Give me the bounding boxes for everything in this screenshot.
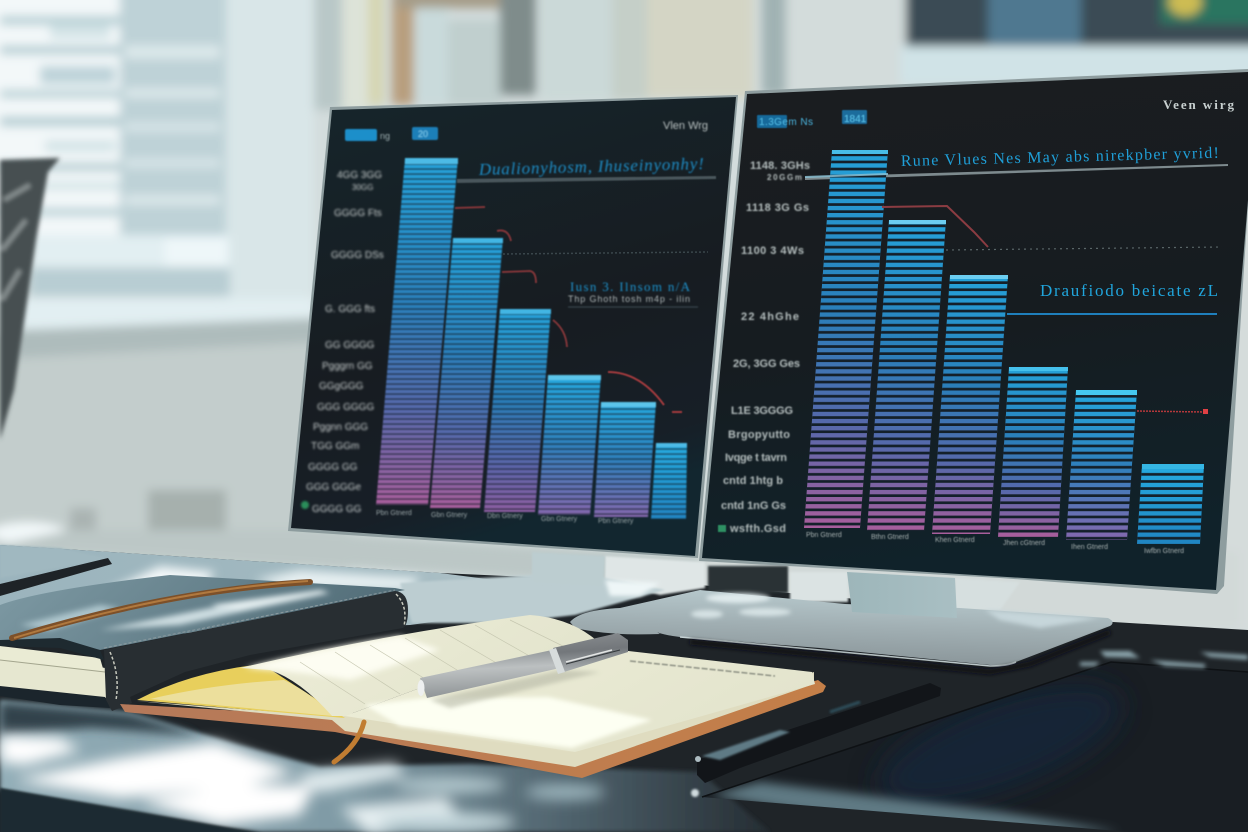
bottom pages (137, 672, 814, 767)
radiator vent (148, 490, 226, 536)
left trend lines (455, 207, 682, 412)
brown elastic strap (12, 581, 310, 638)
right tabs: 1.3Gem Ns (759, 117, 813, 128)
left tabs: 20 (418, 129, 428, 139)
left view label: Vlen Wrg (663, 120, 708, 132)
curled page (240, 615, 596, 716)
silver pen (418, 633, 628, 708)
right heading: Rune Vlues Nes May abs nirekpber yvrid! (901, 145, 1219, 170)
right y-axis labels: 20GGm (767, 173, 802, 182)
dark gap between stands (708, 566, 788, 593)
right x-axis labels: Bthn Gtnerd (871, 534, 909, 541)
sun patches foreground (0, 735, 605, 832)
right monitor (699, 69, 1248, 594)
sun patches behind journal (110, 566, 420, 600)
left callout: Thp Ghoth tosh m4p - ilin (568, 294, 690, 304)
desk surface (0, 545, 1248, 832)
right x-axis labels: Pbn Gtnerd (806, 532, 842, 539)
right red marker (1137, 409, 1208, 414)
right y-axis labels: Brgopyutto (728, 429, 790, 441)
left y-axis labels: Pgggrn GG (322, 361, 373, 372)
journal spine (104, 591, 408, 711)
left monitor stand (400, 552, 705, 623)
right x-axis labels: Ihen Gtnerd (1071, 544, 1108, 551)
right x-axis labels: Khen Gtnerd (935, 537, 975, 544)
leather journal (0, 575, 408, 711)
right sub heading: Draufiodo beicate zL (1040, 281, 1218, 300)
right y-axis labels: wsfth.Gsd (729, 523, 786, 535)
left x-axis labels (376, 510, 634, 525)
left dashed line (503, 252, 708, 254)
right y-axis labels (721, 160, 810, 535)
right heading (805, 145, 1228, 180)
left y-axis labels: Pggnn GGG (313, 422, 368, 433)
wall band behind monitors (0, 530, 700, 590)
page lines (300, 620, 575, 704)
window blinds (0, 0, 226, 236)
left y-axis labels: G. GGG fts (325, 304, 375, 315)
right y-axis labels: 22 4hGhe (741, 311, 799, 323)
highlight line across first bar (805, 174, 888, 177)
left x-axis labels: Gbn Gtnery (541, 516, 578, 523)
stand shadow (690, 632, 1110, 672)
right y-axis labels: 1148. 3GHs (750, 160, 810, 172)
right status dot (718, 525, 726, 532)
right page (345, 640, 815, 752)
notebook cover (120, 680, 826, 778)
lit desk behind journal (0, 545, 620, 640)
journal pages (0, 647, 108, 698)
right x-axis labels (806, 532, 1184, 555)
right bar chart (804, 150, 1204, 544)
right y-axis labels: cntd 1nG Gs (721, 500, 786, 512)
right y-axis labels: 1118 3G Gs (746, 202, 809, 214)
left callout (568, 279, 698, 307)
left status dot (301, 501, 309, 509)
right tabs (757, 110, 867, 128)
journal front flap (0, 638, 104, 660)
right monitor stand (570, 572, 1113, 666)
left y-axis labels: GGG GGGe (306, 482, 361, 493)
window sill (15, 235, 350, 358)
left x-axis labels: Pbn Gtnery (598, 518, 634, 525)
left tabs (345, 127, 438, 141)
blurred shelf of books (312, 0, 906, 110)
chair back (0, 158, 60, 440)
tablet at far left (0, 545, 112, 596)
right tabs: 1841 (844, 114, 867, 125)
left y-axis labels: GGG GGGG (317, 402, 374, 413)
left y-axis labels: 4GG 3GG (337, 170, 382, 181)
journal cover (0, 575, 405, 650)
right x-axis labels: Jhen cGtnerd (1003, 540, 1045, 547)
left y-axis labels: GGgGGG (319, 381, 364, 392)
left y-axis labels: GGGG Fts (334, 208, 382, 219)
right dashed line (946, 247, 1222, 250)
handwritten line (630, 661, 775, 676)
right red trend line (882, 206, 988, 247)
left y-axis labels: GGGG DSs (331, 250, 384, 261)
left heading: Dualionyhosm, Ihuseinyonhy! (478, 154, 704, 179)
window frame (222, 0, 314, 335)
left y-axis labels: TGG GGm (311, 441, 359, 452)
notebook bookmark (334, 722, 364, 762)
left y-axis labels (306, 170, 384, 515)
left y-axis labels: 30GG (352, 183, 373, 192)
right y-axis labels: Ivqge t tavrn (725, 452, 787, 464)
yellow left page (137, 664, 345, 718)
right x-axis labels: Iwfbn Gtnerd (1144, 548, 1184, 555)
right view label: Veen wirg (1163, 97, 1234, 112)
left bar chart (376, 158, 687, 519)
left monitor (288, 95, 738, 558)
blurred poster (900, 0, 1248, 85)
left x-axis labels: Dbn Gtnery (487, 513, 523, 520)
right y-axis labels: 1100 3 4Ws (741, 245, 804, 257)
left y-axis labels: GGGG GG (312, 504, 362, 515)
right y-axis labels: cntd 1htg b (723, 475, 783, 487)
lit desk foreground (0, 700, 770, 832)
left y-axis labels: GGGG GG (308, 462, 358, 473)
right y-axis labels: 2G, 3GG Ges (733, 358, 800, 370)
dark tablet (691, 651, 1248, 832)
monitor stands (400, 552, 1113, 672)
black stylus pen (695, 683, 941, 783)
small glowing object (0, 522, 66, 544)
left callout: Iusn 3. Ilnsom n/A (570, 279, 691, 294)
blurred background scene (0, 0, 1248, 630)
right y-axis labels: L1E 3GGGG (731, 405, 793, 417)
open notebook (120, 615, 826, 778)
left x-axis labels: Pbn Gtnerd (376, 510, 412, 517)
desk reflections (1080, 651, 1248, 668)
left x-axis labels: Gbn Gtnery (431, 512, 468, 519)
left y-axis labels: GG GGGG (325, 340, 375, 351)
journal bottom cover (0, 686, 110, 708)
page sunlight (365, 697, 652, 748)
left tabs: ng (380, 131, 390, 141)
